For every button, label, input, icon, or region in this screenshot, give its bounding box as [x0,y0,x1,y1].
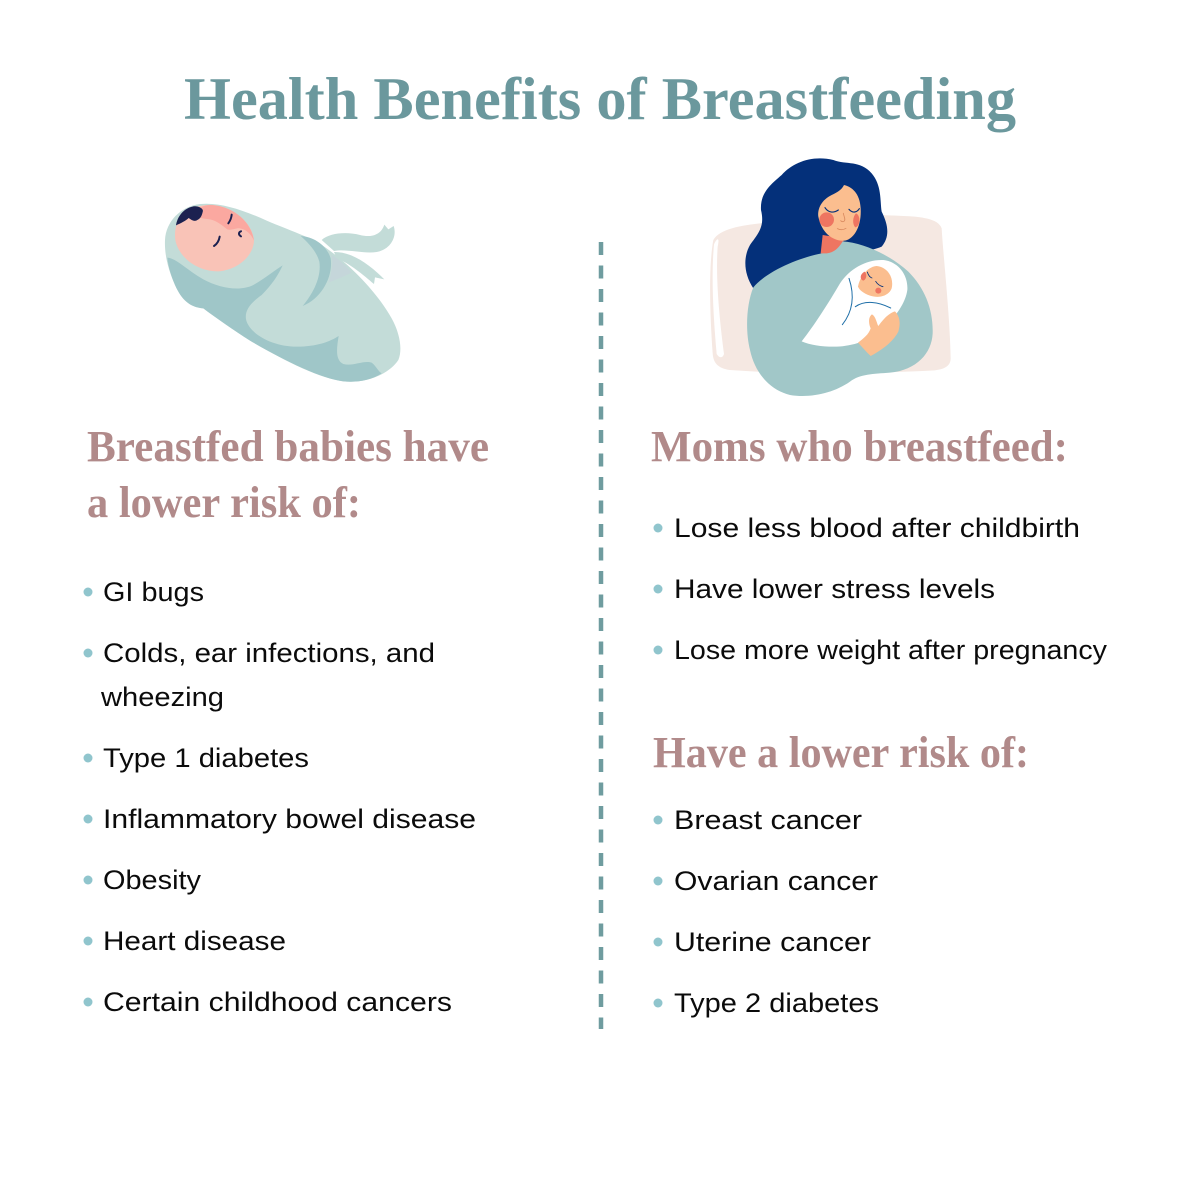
heading: babies [87,422,489,527]
icon: mother holding baby [710,158,951,396]
list: mom risks [654,805,879,1018]
icon: blanket body [165,204,400,382]
icon: mother hand [858,311,900,356]
list: baby risks: Certain childhood cancers [103,987,452,1017]
icon: swaddled baby cheeks [861,272,881,294]
icon: blanket fold [301,236,331,306]
icon: blanket tail ribbons [322,225,395,284]
list: mom risks: Ovarian cancer [674,866,878,896]
icon: baby eyes and nose [214,215,241,246]
icon: hair [745,158,887,288]
icon: swaddled baby facial features [867,272,883,287]
list: mom benefits: Lose more weight after pregnancy [674,635,1108,665]
list: baby risks: Heart disease [103,926,286,956]
icon: cheeks [819,212,859,227]
list: mom risks: Type 2 diabetes [674,988,879,1018]
title: Health Benefits of Breastfeeding [184,66,1016,132]
icon: blanket fold lines [842,278,891,325]
icon: blanket shadow [167,258,382,382]
icon: swaddled baby [165,204,400,382]
heading: babies: Breastfed babies have [87,422,489,471]
icon: pillow [710,215,951,373]
list: mom benefits [654,513,1108,665]
icon: mother torso [747,241,933,396]
list: mom risks: Uterine cancer [674,927,871,957]
icon: fold underside [328,255,352,283]
list: baby risks: Type 1 diabetes [103,743,309,773]
list: mom benefits: Have lower stress levels [674,574,995,604]
panel: moms [651,422,1108,1018]
panel: babies [84,422,489,1017]
icon: swaddled baby blanket [802,260,907,347]
icon: mother facial features [825,208,859,212]
icon: mother face [818,185,861,241]
heading: lower risk: Have a lower risk of: [653,728,1029,777]
icon: baby face [175,205,254,271]
heading: moms: Moms who breastfeed: [651,422,1068,471]
icon: neck [821,235,844,254]
list: baby risks: wheezing [100,682,224,712]
icon: pillow highlight [713,239,724,357]
list: baby risks: GI bugs [103,577,204,607]
list: baby risks: Obesity [103,865,202,895]
list: baby risks: Colds, ear infections, and [103,638,435,668]
icon: baby hair [176,206,203,225]
heading: babies: a lower risk of: [87,478,361,527]
icon: baby forehead [193,205,254,241]
list: mom risks: Breast cancer [674,805,862,835]
list: baby risks: Inflammatory bowel disease [103,804,476,834]
list: mom benefits: Lose less blood after childbirth [674,513,1080,543]
divider [599,242,603,1029]
list: baby risks [84,577,476,1017]
icon: swaddled baby face [858,266,892,297]
